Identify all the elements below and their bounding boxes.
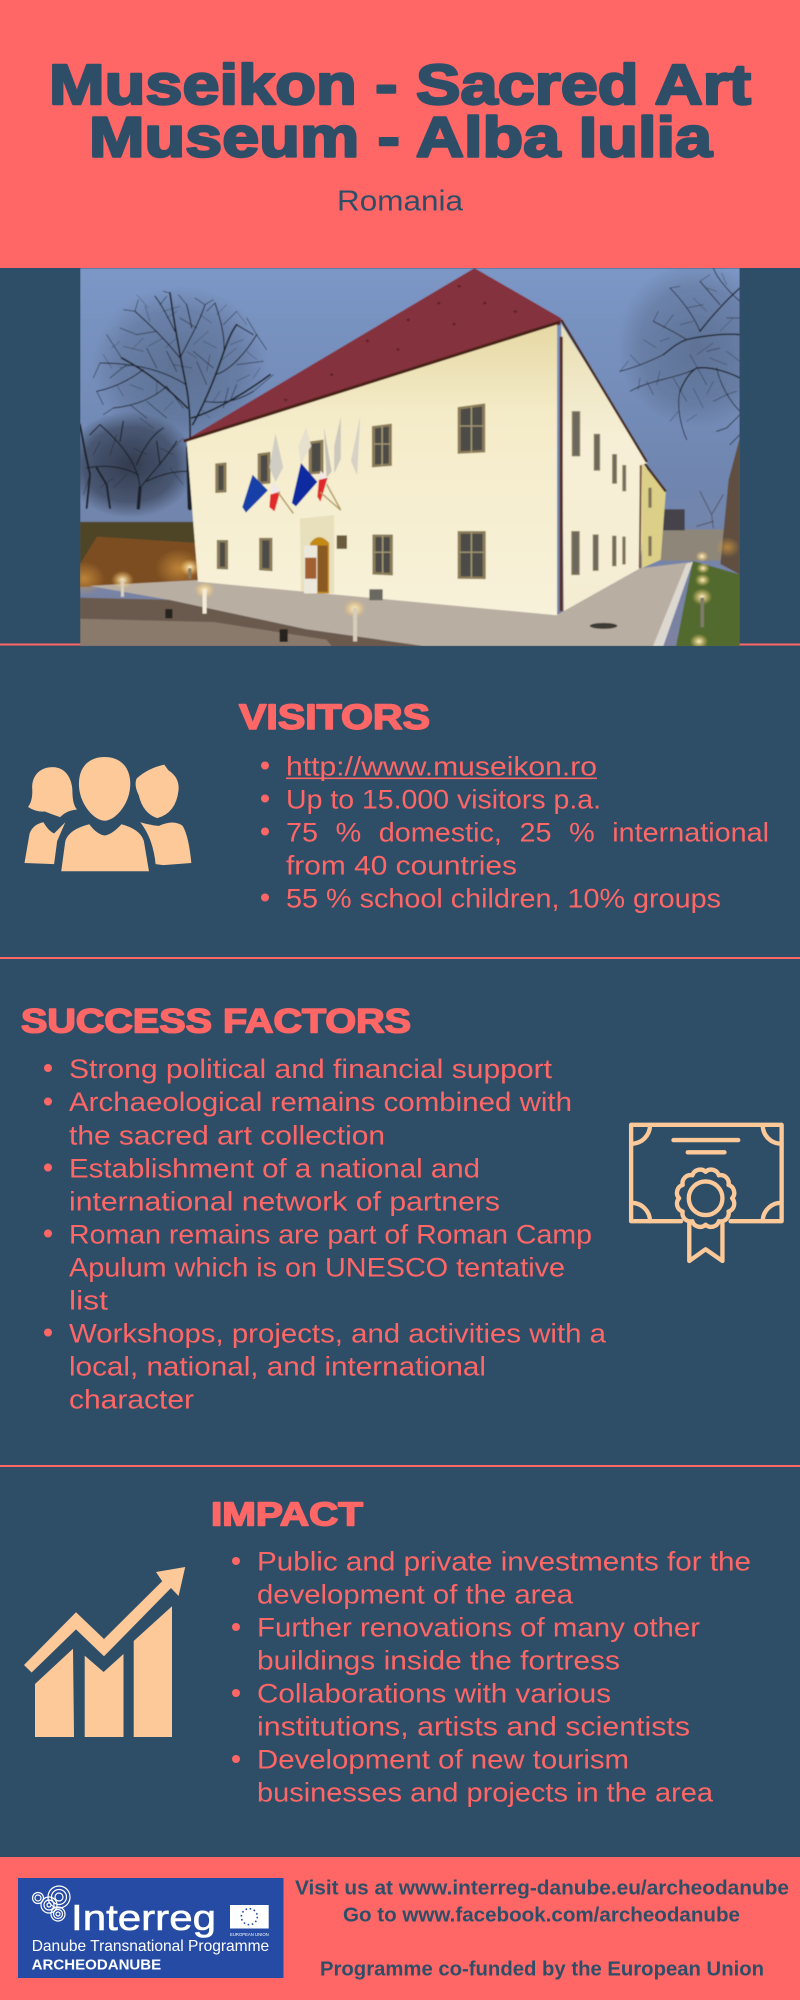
list: impact: Further renovations of many other [257,1612,700,1642]
title: Museum - Alba Iulia [89,106,714,170]
list: impact: institutions, artists and scientists [257,1712,690,1742]
heading: success factors: SUCCESS FACTORS [21,1002,411,1040]
portal and door [300,515,334,593]
left trees [80,290,274,516]
windows on front [217,405,484,578]
list: impact: Public and private investments for the [257,1546,751,1576]
list: success factors: Strong political and financial support [69,1054,553,1084]
list: success factors: international network of partners [69,1186,500,1216]
list: visitor facts: 75 % domestic, 25 % international [286,818,769,848]
list: impact [232,1546,751,1808]
logo: Interreg Danube Transnational Programme: Danube Transnational Programme [32,1938,269,1955]
flags [269,434,283,482]
retaining wall [80,522,200,587]
logo: Interreg Danube Transnational Programme [18,1878,284,1978]
grass [676,561,740,646]
list: impact: Development of new tourism [257,1744,629,1774]
divider [0,957,800,959]
icon: group of people [24,757,191,871]
list: visitor facts [261,752,769,914]
footer text: links and funding note: Go to www.facebook.com/archeodanube [343,1904,740,1926]
footer text: links and funding note: Programme co-funded by the European Union [320,1958,764,1980]
right trunk [720,438,740,575]
list: success factors: the sacred art collection [69,1120,385,1150]
window bars [374,406,484,577]
logo: Interreg Danube Transnational Programme: ARCHEODANUBE [32,1957,162,1973]
side wall [561,324,647,611]
list: success factors: character [69,1384,194,1414]
far wall [661,529,724,561]
list: visitor facts: from 40 countries [286,850,517,880]
icon: rising bar chart with arrow [24,1567,185,1737]
list: success factors [44,1054,607,1414]
list: success factors: Workshops, projects, and activities with a [69,1318,607,1348]
list: impact: businesses and projects in the area [257,1778,714,1808]
title [49,53,751,170]
right tree [619,268,740,528]
panel: footer [0,1857,800,2000]
list: impact: buildings inside the fortress [257,1646,620,1676]
pavement [89,562,693,646]
list: visitor facts: Up to 15.000 visitors p.a. [286,784,601,814]
list: impact: Collaborations with various [257,1678,611,1708]
footer text: links and funding note: Visit us at www.interreg-danube.eu/archeodanube [295,1878,789,1900]
panel: success factors [21,1002,782,1414]
list: success factors: Archaeological remains combined with [69,1087,572,1117]
icon: certificate [631,1125,782,1261]
photo: museum building at dusk [63,261,777,649]
heading: impact: IMPACT [211,1496,363,1532]
subtitle: country: Romania [337,186,464,218]
list: success factors: local, national, and international [69,1352,486,1382]
title: Museikon - Sacred Art [49,53,751,117]
roof [184,268,561,441]
roof studs [284,285,517,401]
list: success factors: list [69,1286,109,1316]
heading: visitors: VISITORS [239,698,430,737]
list: success factors: Apulum which is on UNESCO tentative [69,1252,565,1282]
panel: header [0,0,800,268]
list: success factors: Roman remains are part of Roman Camp [69,1220,592,1250]
divider [0,1465,800,1467]
list: visitor facts: 55 % school children, 10% groups [286,884,721,914]
logo: Interreg Danube Transnational Programme: Interreg [71,1897,216,1938]
lamps [111,551,712,649]
footer text: links and funding note [295,1878,789,1980]
front wall [187,324,557,615]
list: visitor facts: http://www.museikon.ro [286,752,597,782]
list: impact: development of the area [257,1580,574,1610]
panel: impact [24,1496,751,1808]
windows on side [572,412,651,575]
panel: visitors [24,698,769,914]
divider under photo [0,644,800,646]
dirt foreground [80,598,423,646]
logo: Interreg Danube Transnational Programme: EUROPEAN UNION [230,1932,269,1937]
list: success factors: Establishment of a national and [69,1154,480,1184]
